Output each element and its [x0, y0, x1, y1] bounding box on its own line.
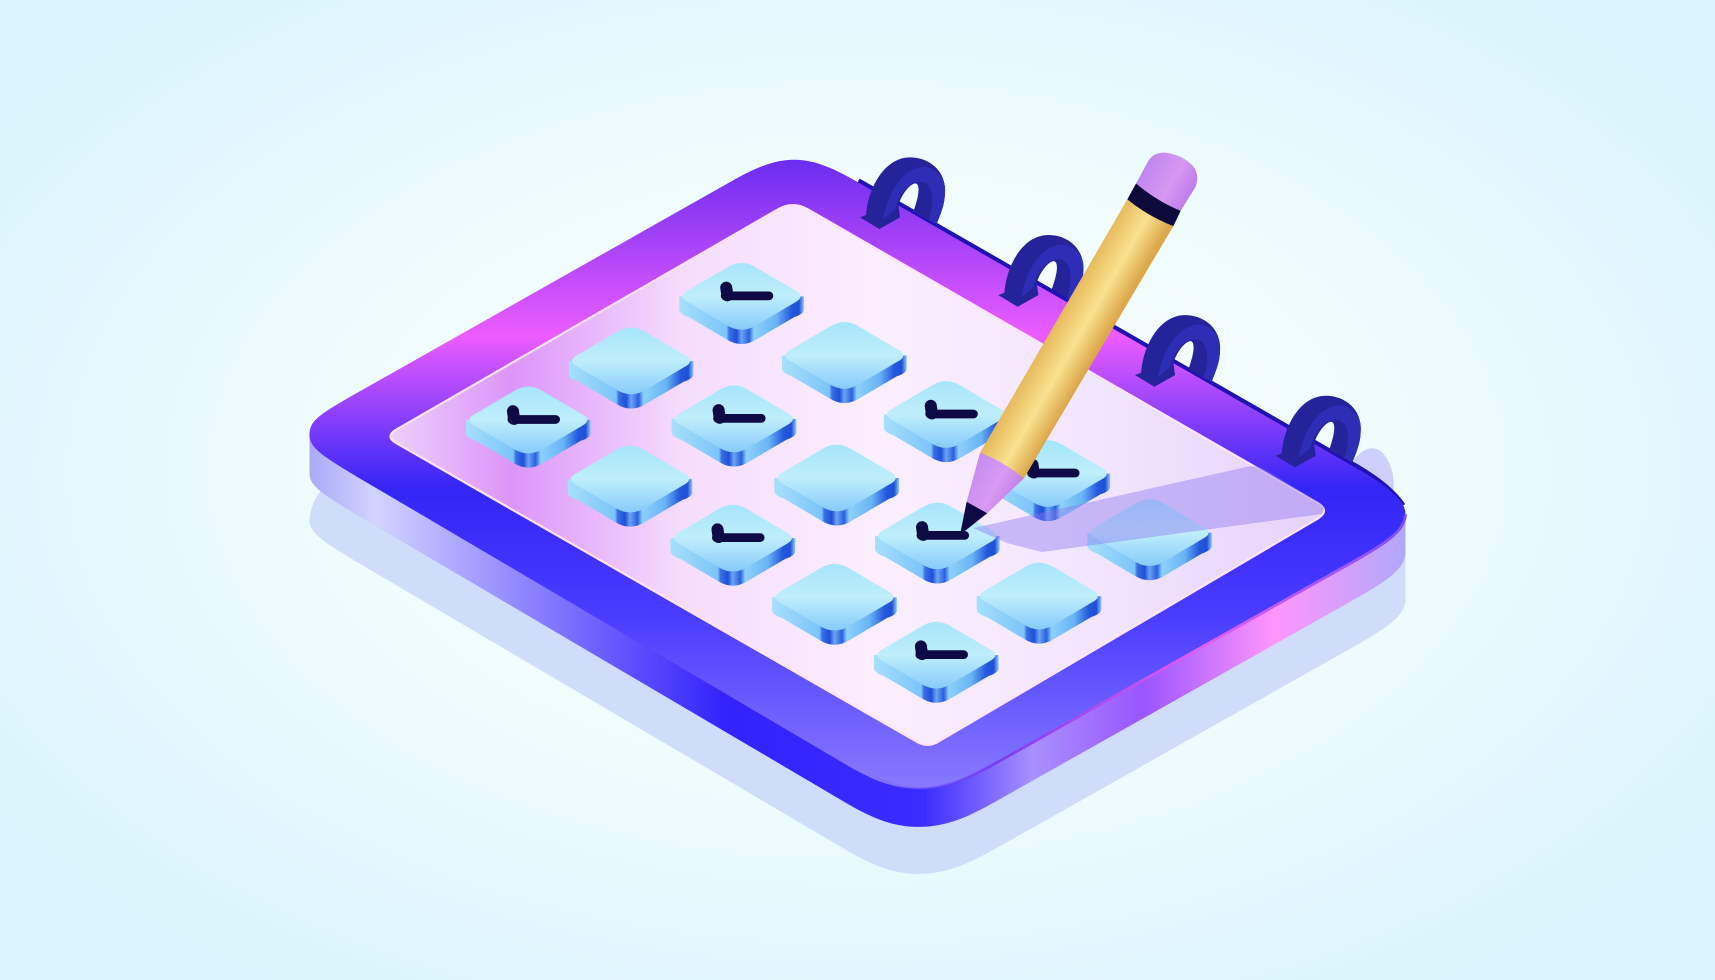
binder rings — [860, 157, 1361, 467]
paper sheet — [390, 205, 1324, 745]
ring 4 — [1276, 396, 1361, 467]
board side — [310, 435, 1405, 827]
board face — [310, 160, 1405, 789]
pencil body — [980, 199, 1173, 478]
ring 2 — [998, 235, 1083, 307]
tile checked — [466, 387, 591, 468]
pencil eraser — [1136, 153, 1197, 211]
pencil — [960, 153, 1197, 535]
ground reflection — [310, 262, 1405, 874]
board back edge — [859, 180, 1403, 505]
calendar board — [310, 160, 1405, 827]
tile empty — [568, 446, 692, 527]
pencil lead tip — [960, 502, 987, 535]
tile checked — [679, 263, 804, 344]
tile empty — [782, 322, 907, 403]
tile checked — [985, 440, 1110, 521]
tile checked — [884, 381, 1008, 462]
pencil shadow — [973, 466, 1324, 552]
tile empty — [772, 564, 897, 645]
tile empty — [569, 328, 693, 409]
pencil sharpened cone — [967, 453, 1024, 513]
tile empty — [774, 445, 899, 526]
ring 3 — [1135, 315, 1220, 387]
pencil ferrule band — [1127, 183, 1181, 226]
ring 1 — [860, 157, 945, 229]
calendar day tiles — [466, 263, 1212, 703]
tile checked — [672, 386, 796, 466]
board front highlight edge — [875, 514, 1405, 789]
tile empty — [977, 563, 1101, 644]
tile checked — [874, 622, 999, 703]
tile checked — [670, 505, 795, 586]
tile empty — [1087, 499, 1212, 580]
tile checked under pencil — [875, 503, 1000, 584]
ring shadow on background — [1354, 448, 1394, 492]
